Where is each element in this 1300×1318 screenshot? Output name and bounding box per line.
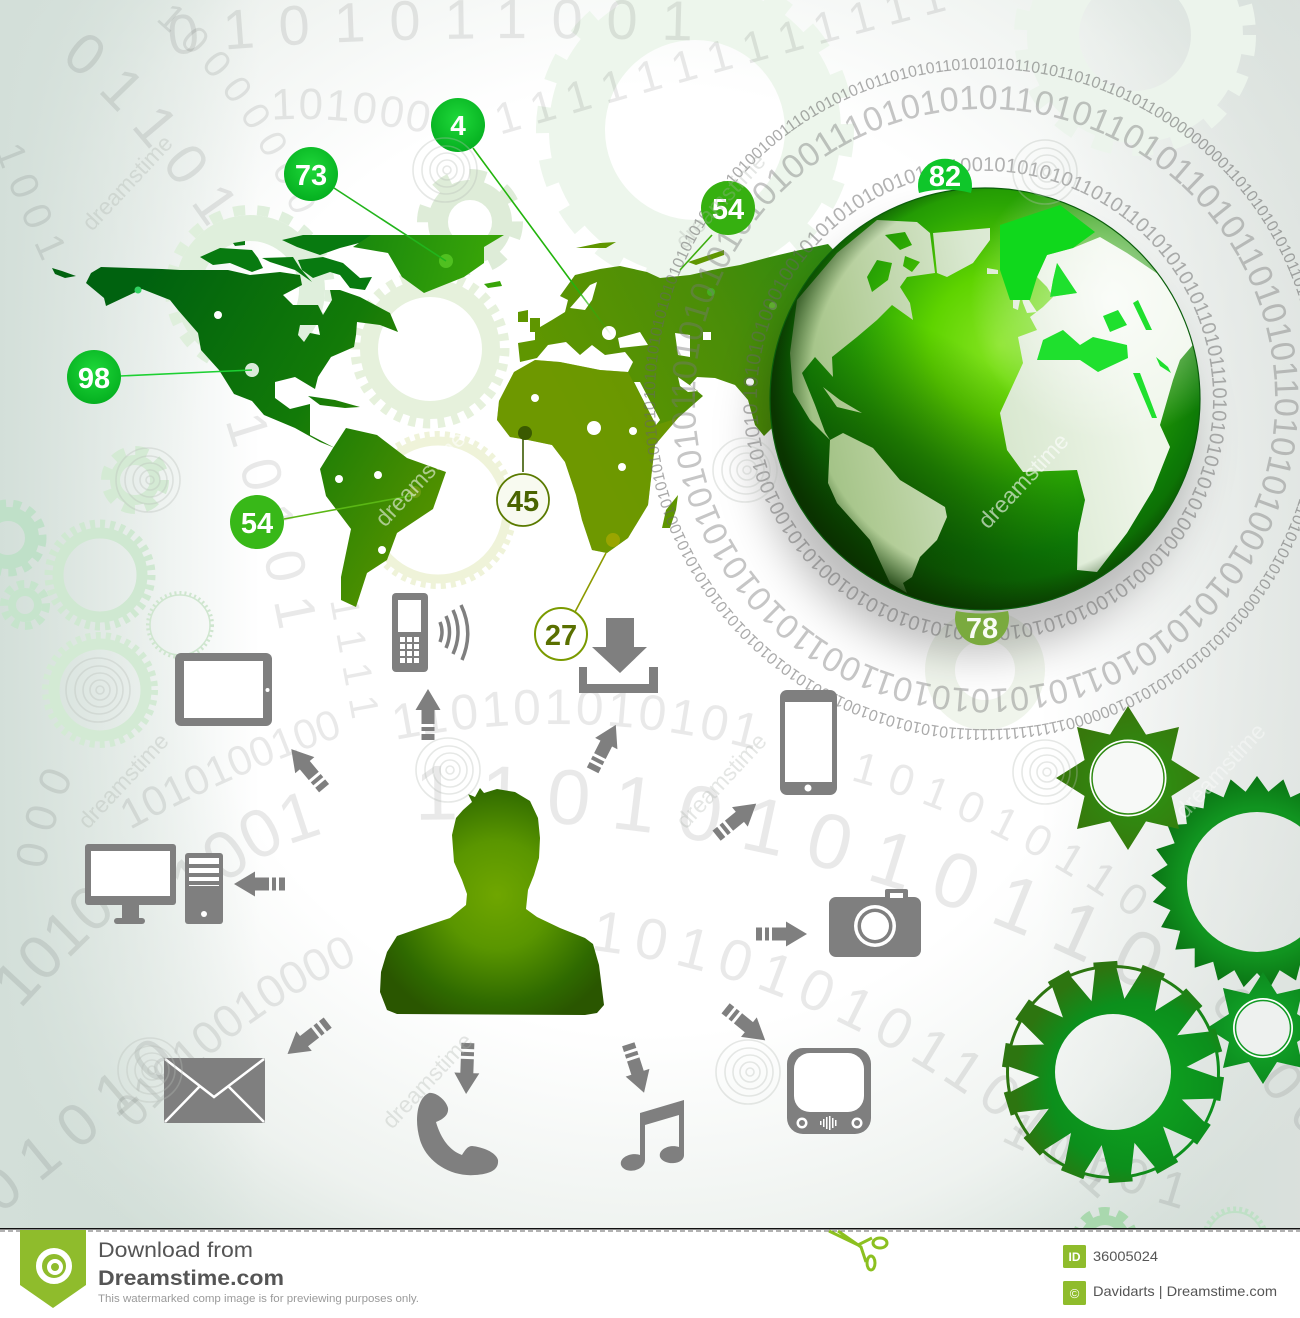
gear: left edge small [4,584,46,626]
gear: bottom edge [1074,1207,1136,1228]
watermarks: dreamstime [73,728,174,833]
globe: shine [976,194,1199,424]
badge: 54 south america [230,495,284,549]
background binary digits: 110101010101 [395,690,754,749]
watermarks: dreamstime [670,148,771,253]
background binary digits: 1 1 0 1 0 1 0 1 0 1 1 0 [421,766,1160,986]
watermarks: dreamstime [973,428,1074,533]
icon: download [579,618,658,693]
gear: bottom right outline [1204,1206,1266,1228]
arrow: to tablet [282,741,334,796]
map: Africa and Eurasia [497,244,880,553]
map: South America [320,428,446,607]
gear: large right [1151,776,1300,988]
badge: 78 [955,611,1009,645]
icon: mobile keypad phone [392,593,428,672]
map: location dots [134,254,777,554]
background binary digits: 1 0 0 0 0 0 0 0 [158,6,315,212]
globe: rim line [770,188,1200,610]
arrow: to keypad phone [416,689,440,740]
icon: television [787,1048,871,1134]
connector lines [120,148,712,612]
gear: star top [1056,706,1200,850]
footer: dreamstime ribbon logo [20,1230,86,1308]
badge: 73 [284,147,338,201]
map: North America mainland [52,267,398,448]
globe [769,187,1201,611]
map: Greenland [353,235,504,293]
footer: image ID: 36005024 [1093,1248,1158,1264]
watermarks: dreamstime [370,426,471,531]
arrow: to telephone [454,1043,480,1094]
footer strip [0,1228,1300,1318]
gear: behind North America [170,210,330,370]
gear: below globe [940,625,1030,715]
icon: computer tower [185,853,223,924]
world map [52,235,880,607]
badge: 27: 27 [545,620,577,652]
footer: ID badge [1063,1245,1086,1268]
gear: spoked wheel [1002,960,1224,1184]
globe: dark lower left [785,330,1056,600]
gear: star lower right [1207,972,1300,1084]
gear: top right [1022,0,1248,148]
badge: 98 [67,350,121,404]
gear: lower map [363,435,513,585]
badge: 82 [918,159,972,193]
arrow: to television [718,999,773,1050]
arrow: to envelope [280,1013,335,1064]
icon: envelope [164,1058,265,1123]
badge: 54 south america: 54 [241,508,273,540]
footer: site name: Dreamstime.com [98,1267,284,1290]
gear: behind Greenland [424,176,516,268]
footer: scissors [829,1231,887,1270]
globe: rim shading [770,188,1200,610]
badge: 27 [535,608,587,660]
gear: left edge top [0,504,42,572]
badge: 4: 4 [450,110,466,141]
footer: copyright badge: © [1070,1286,1080,1301]
arrow: to desktop [234,872,285,896]
background binary digits: 1 0 1 0 1 [1004,1114,1181,1208]
watermarks: dreamstime [77,130,178,235]
footer: ID badge: ID [1068,1250,1081,1264]
gear: left lower [46,636,154,744]
badge: 4 [431,98,485,152]
gear: thin outline [148,593,212,657]
background binary digits: 01010010000 [117,938,353,1124]
background binary digits: 1001 [176,794,320,880]
icon: tablet [175,653,272,726]
binary rings around the globe [644,58,1300,740]
icon: telephone handset [417,1093,498,1175]
map: Arctic archipelago [200,235,372,290]
map: islands east [518,242,724,528]
icon: music notes [621,1100,684,1171]
icon: desktop monitor [85,844,176,924]
background binary digits: 1 1 1 1 [330,602,378,718]
arrows radiating from person [234,689,807,1097]
badge: 82: 82 [929,161,961,193]
globe: arctic green [1000,205,1095,300]
arrow: to camera [756,922,807,946]
device icons [85,593,921,1175]
icon: camera [829,889,921,957]
badge: 73: 73 [295,160,327,192]
badge: 98: 98 [78,363,110,395]
footer: copyright badge [1063,1281,1086,1305]
person silhouette [380,788,604,1015]
gear: west coast star [107,452,163,508]
footer: download heading: Download from [98,1239,253,1262]
background binary digits: 1 0 1 0 1 0 1 1 0 [854,754,1146,914]
watermarks: dreamstime [1170,718,1271,823]
map: Africa olive tint [497,360,678,553]
gear: centre of map [357,276,503,422]
badge: 45 [497,474,549,526]
footer: author credit: Davidarts | Dreamstime.com [1093,1283,1277,1299]
background binary digits: 1 0 1 0 1 [226,416,315,628]
arrow: to smartphone [709,794,764,845]
badge: 54 asia [701,181,755,235]
globe: bright seas [1037,263,1171,418]
footer: disclaimer: This watermarked comp image is for previewing purposes only. [98,1293,419,1305]
globe shadow [759,222,1191,654]
globe: continents [790,220,1197,593]
badge: 45: 45 [507,486,539,518]
gear: left middle [49,524,151,626]
icon: smartphone [780,690,837,795]
gear: large top centre [545,0,845,280]
badge: 54 asia: 54 [712,194,744,226]
background binary digits: 0 0 0 [17,770,70,866]
watermark spirals [66,138,1077,1104]
green gears [995,706,1300,1190]
watermarks: dreamstime [671,728,772,833]
watermarks: dreamstime [377,1028,478,1133]
watermarks [73,130,1271,1133]
badge: 78: 78 [966,613,998,645]
arrow: to download [582,719,627,776]
background binary digits: 1010100100 [122,711,338,828]
background binary digits: 0 1 1 0 1 [68,35,234,226]
arrow: to music [616,1040,656,1097]
icon: signal waves [440,605,468,660]
